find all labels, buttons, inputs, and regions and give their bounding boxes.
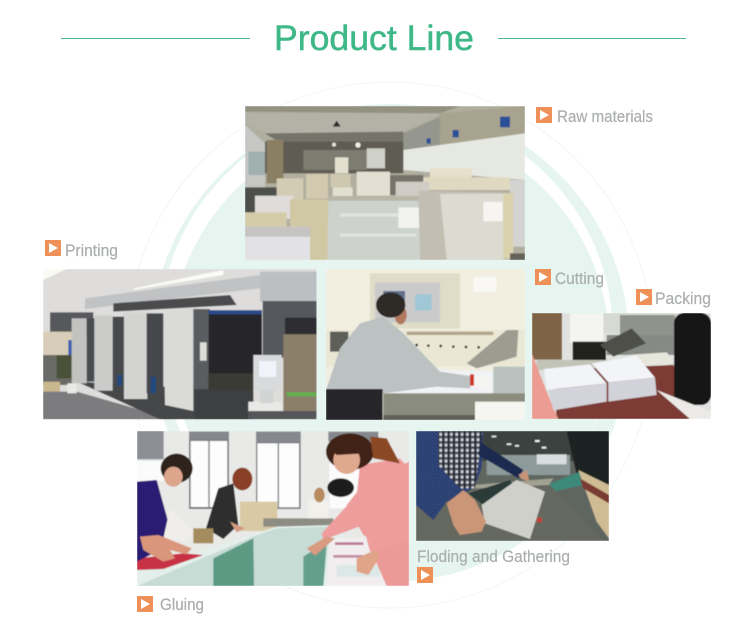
label: cutting (535, 269, 604, 288)
label: printing (45, 240, 118, 260)
label: floding and gathering: Floding and Gathering (417, 547, 570, 566)
title: Product Line (274, 19, 474, 58)
label: raw materials: Raw materials (557, 107, 653, 126)
label: packing: Packing (655, 289, 711, 308)
photo: packing table (532, 313, 711, 419)
label: cutting: Cutting (555, 269, 604, 288)
photo: printing press (43, 269, 317, 419)
photo: gluing workers (137, 431, 409, 586)
photo: cutting machine (326, 269, 525, 420)
label: gluing: Gluing (160, 595, 204, 614)
label: floding and gathering (417, 547, 570, 583)
photo: raw materials warehouse (245, 106, 525, 260)
background circles (127, 82, 653, 608)
label: gluing (137, 595, 204, 614)
photo: folding and gathering (416, 431, 609, 541)
label: printing: Printing (65, 241, 118, 260)
